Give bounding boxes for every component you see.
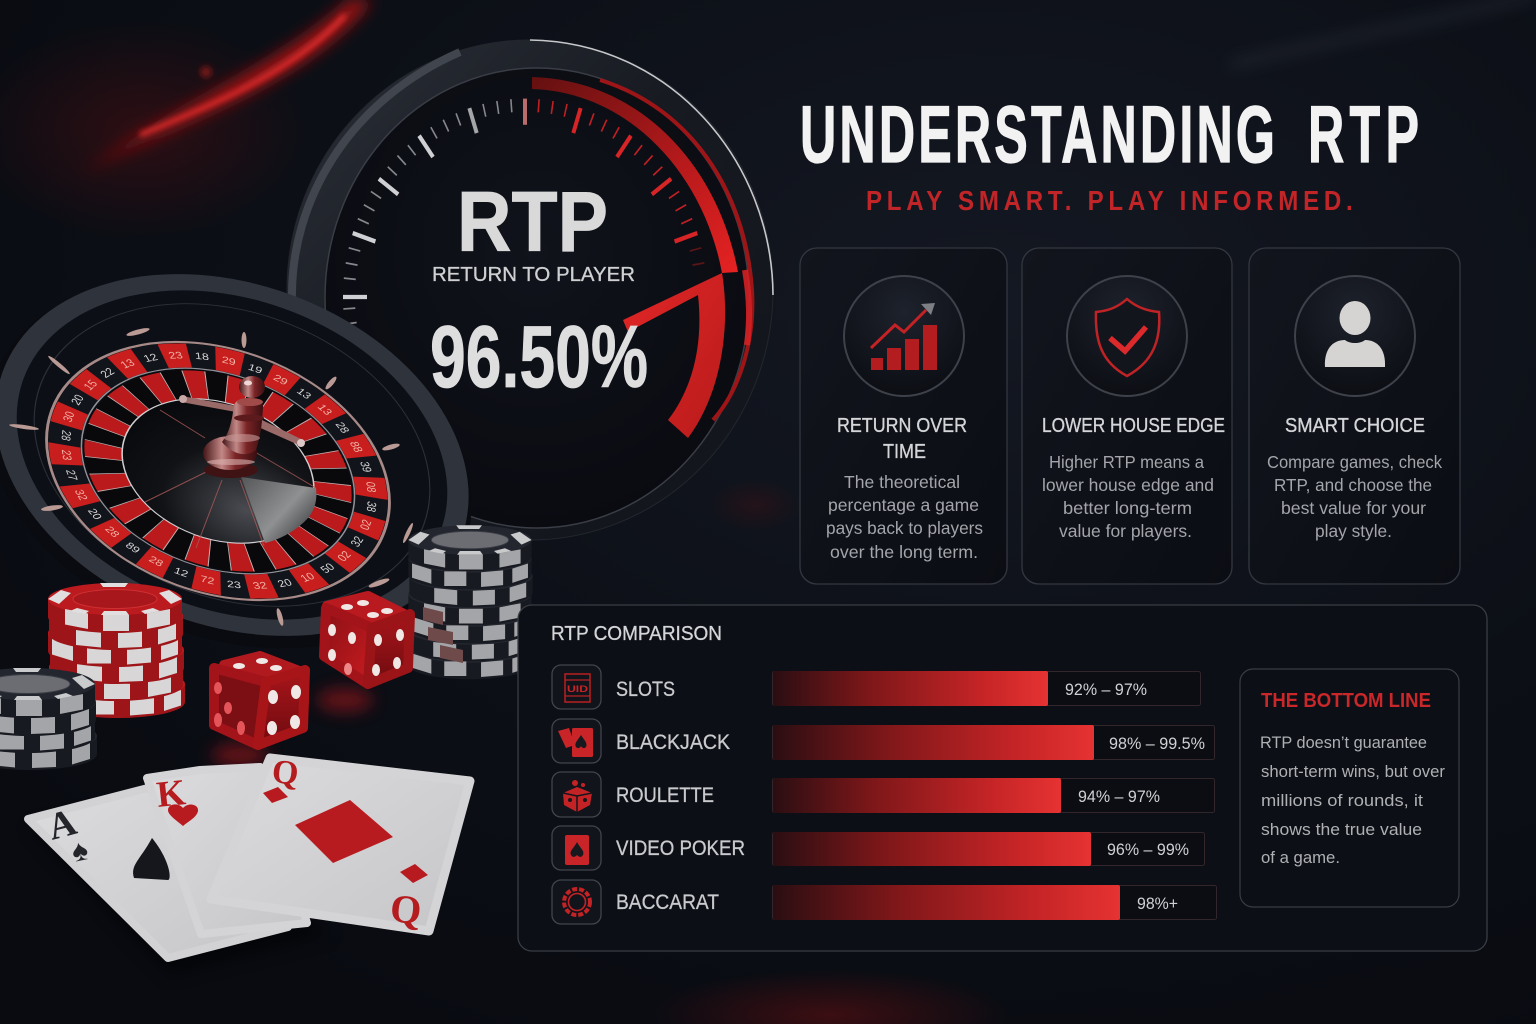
body text: best value for your <box>1281 498 1426 518</box>
card: queen of diamonds: Q <box>388 885 424 933</box>
wheel rings and numbers: 08 <box>363 481 378 493</box>
body text <box>1042 452 1214 541</box>
wheel rings and numbers: 15 <box>82 378 101 393</box>
bar <box>772 671 1200 706</box>
wheel rings and numbers: 20 <box>276 578 294 590</box>
wheel rings and numbers: 13 <box>315 403 334 417</box>
wheel rings and numbers: 12 <box>173 566 189 580</box>
gauge tick marks <box>343 99 704 324</box>
body text <box>1267 452 1442 541</box>
bar: 98% – 99.5% <box>1109 734 1205 753</box>
bar: 94% – 97% <box>1078 787 1160 806</box>
icon: slot machine: UID <box>567 684 589 694</box>
icon: shield check <box>1067 276 1187 396</box>
red light swoosh <box>80 0 372 175</box>
label: SLOTS <box>616 678 675 701</box>
gauge value: 96.50% <box>430 307 648 406</box>
bar: 98%+ <box>1137 894 1178 913</box>
dice reflections <box>212 688 373 767</box>
title: RTP <box>1308 90 1419 180</box>
wheel rings and numbers: 12 <box>142 352 160 364</box>
panel: lower house edge <box>1022 248 1232 584</box>
icon: slot machine <box>552 665 601 709</box>
card: ace of spades: A <box>43 801 81 849</box>
label: ROULETTE <box>616 784 714 807</box>
wheel rings and numbers: 23 <box>226 579 242 591</box>
wheel rings and numbers: 29 <box>221 355 236 368</box>
callout: the bottom line <box>1240 669 1459 907</box>
subtitle: PLAY SMART. PLAY INFORMED. <box>866 184 1353 216</box>
wheel rings and numbers: 22 <box>98 366 118 380</box>
label: BLACKJACK <box>616 731 730 754</box>
roulette wheel <box>0 209 525 713</box>
panel: smart choice <box>1249 248 1460 584</box>
card: king of hearts: K <box>155 772 188 816</box>
wheel rings and numbers: 39 <box>357 462 374 472</box>
wheel rings and numbers: 88 <box>346 441 365 453</box>
icon: poker card <box>552 826 601 870</box>
playing cards <box>28 753 470 975</box>
wheel dish <box>0 209 525 713</box>
gauge red arc <box>532 77 752 420</box>
heading: LOWER HOUSE EDGE <box>1042 415 1225 437</box>
body text: value for players. <box>1059 521 1192 541</box>
card: ace of spades <box>28 788 288 958</box>
body text: play style. <box>1315 521 1392 541</box>
callout body <box>1260 733 1445 867</box>
card: queen of diamonds <box>211 753 470 933</box>
wheel pocket markers <box>9 326 414 626</box>
callout body: millions of rounds, it <box>1261 791 1423 810</box>
row: baccarat <box>552 880 1216 924</box>
icon: dice <box>552 772 601 817</box>
wheel rings and numbers: 02 <box>335 549 354 564</box>
card shadow <box>30 800 330 975</box>
body text: percentage a game <box>828 495 979 515</box>
callout body: shows the true value <box>1261 820 1422 839</box>
wheel spokes <box>145 410 316 548</box>
label: BACCARAT <box>616 891 719 914</box>
wheel rings and numbers <box>10 297 426 645</box>
wheel rings and numbers: 30 <box>61 410 78 424</box>
row: video poker <box>552 826 1204 870</box>
callout body: RTP doesn’t guarantee <box>1260 733 1427 752</box>
wheel rings and numbers: 23 <box>58 449 73 461</box>
body text: Compare games, check <box>1267 452 1442 472</box>
gauge needle and thick arc <box>623 273 725 438</box>
body text: pays back to players <box>826 518 983 538</box>
wheel rings and numbers: 10 <box>298 571 318 584</box>
icon: cards <box>552 719 601 763</box>
wheel rings and numbers: 19 <box>247 362 263 376</box>
wheel rings and numbers: 28 <box>147 555 165 569</box>
die: front <box>214 656 305 745</box>
wheel rings and numbers: 50 <box>318 562 338 576</box>
wheel rings and numbers: 28 <box>58 429 73 442</box>
wheel turret <box>179 376 305 478</box>
wheel rings and numbers: 18 <box>194 351 210 363</box>
body text: over the long term. <box>830 542 978 562</box>
wheel rings and numbers: 27 <box>62 470 79 480</box>
card: queen of diamonds: Q <box>270 753 300 793</box>
heading: TIME <box>883 441 926 463</box>
row: slots <box>552 665 1200 709</box>
heading: RETURN OVER <box>837 415 967 437</box>
wheel rings and numbers: 72 <box>200 574 215 587</box>
chips: red stack <box>48 583 185 718</box>
wheel rings and numbers: 13 <box>118 358 138 371</box>
heading <box>837 415 967 463</box>
gauge dial <box>287 40 773 540</box>
card: king of hearts <box>147 767 307 934</box>
callout heading: THE BOTTOM LINE <box>1261 690 1431 712</box>
icon: rising chart <box>844 276 964 396</box>
body text: lower house edge and <box>1042 475 1214 495</box>
gauge outer ring <box>287 40 773 540</box>
bar <box>772 778 1214 813</box>
wheel rings and numbers: 32 <box>252 581 269 591</box>
wheel hub sheen <box>241 477 316 543</box>
wheel rings and numbers: 02 <box>358 518 375 532</box>
wheel rings and numbers: 13 <box>294 387 313 401</box>
wheel rings and numbers: 20 <box>85 507 104 521</box>
callout body: of a game. <box>1261 848 1340 867</box>
title: UNDERSTANDING <box>800 90 1275 180</box>
heading: SMART CHOICE <box>1285 415 1425 437</box>
icon: person <box>1295 276 1415 396</box>
chips: black right stack <box>408 525 534 679</box>
body text: The theoretical <box>844 472 960 492</box>
body text <box>826 472 983 562</box>
comparison heading: RTP COMPARISON <box>551 623 722 645</box>
chips: black left stack <box>0 668 97 770</box>
gauge label return to player: RETURN TO PLAYER <box>432 263 635 286</box>
icon: chip <box>552 880 601 924</box>
wheel rings and numbers: 28 <box>102 525 121 539</box>
bar <box>772 885 1216 920</box>
body text: RTP, and choose the <box>1274 475 1432 495</box>
wheel rings and numbers: 38 <box>363 500 378 513</box>
bar <box>772 725 1214 760</box>
bar: 92% – 97% <box>1065 680 1147 699</box>
wheel rings and numbers: 89 <box>123 541 142 555</box>
wheel rings and numbers: 29 <box>271 373 289 387</box>
wheel rings and numbers: 32 <box>71 489 90 501</box>
wheel rings and numbers: 28 <box>332 421 351 435</box>
gauge label RTP: RTP <box>457 175 608 270</box>
bar: 96% – 99% <box>1107 840 1189 859</box>
panel: RTP comparison <box>518 605 1487 951</box>
card: ace of spades: ♠ <box>69 833 91 869</box>
row: roulette <box>552 772 1214 817</box>
wheel rings and numbers: 32 <box>349 535 367 549</box>
body text: better long-term <box>1063 498 1192 518</box>
wheel rings and numbers: 23 <box>167 351 184 361</box>
callout body: short-term wins, but over <box>1261 762 1445 781</box>
row: blackjack <box>552 719 1214 763</box>
body text: Higher RTP means a <box>1049 452 1204 472</box>
die: back <box>324 596 410 684</box>
bar <box>772 832 1204 866</box>
wheel rings and numbers: 20 <box>69 393 87 407</box>
panel: return over time <box>800 248 1007 584</box>
label: VIDEO POKER <box>616 837 745 860</box>
